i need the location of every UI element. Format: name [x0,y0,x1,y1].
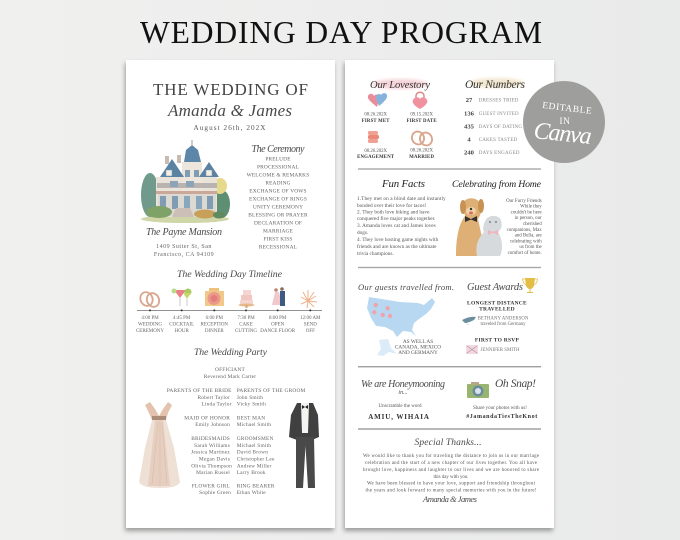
stat rows: DRESSES TRIED [479,98,519,104]
stat rows: CAKES TASTED [479,138,518,143]
illustration: wedding dress [139,402,180,488]
timeline labels: CAKE [239,322,253,328]
wedding party list: John Smith [237,395,263,401]
panel: left program card [126,60,335,528]
wedding party list: Andrew Miller [237,463,271,469]
heading: the wedding of: THE WEDDING OF [153,80,308,99]
milestone: engagement: 08.26.202X [364,149,388,154]
venue address [154,244,214,258]
stat rows: DAYS ENGAGED [479,151,520,156]
heading: special thanks: Special Thanks... [414,438,482,448]
ceremony order list: READING [265,181,291,187]
ceremony order list: MARRIAGE [263,229,294,235]
ceremony heading: The Ceremony [252,144,305,155]
badge: editable in canva: Canva [533,118,593,150]
timeline heading: The Wedding Day Timeline [177,269,283,280]
milestone: first met: FIRST MET [362,119,390,124]
icon: rings [410,130,434,147]
stat rows: 27 [466,97,473,104]
heading: our numbers: Our Numbers [465,79,526,91]
wedding party list: Christopher Lee [237,457,275,463]
scramble prompt: Unscramble the word [378,404,422,409]
icon: two hearts [368,93,387,107]
text: also from: CANADA, MEXICO [395,345,441,351]
text: fun facts [357,196,446,257]
badge: editable in canva: IN [559,117,571,127]
timeline labels: SEND [304,322,317,328]
signature: Amanda & James [422,494,478,504]
illustration: dog and cat [456,198,502,256]
title: WEDDING DAY PROGRAM [140,15,542,50]
timeline labels: 6:00 PM [206,316,224,321]
panel: right program card [345,60,554,528]
text: thank you message: celebration and the start of a new chapter of our lives together. You all have [365,461,537,466]
section: oh snap [466,378,537,420]
ceremony order list: WELCOME & REMARKS [247,173,309,179]
ceremony order list: RECESSIONAL [259,245,297,251]
timeline labels: CEREMONY [136,329,164,334]
wedding party list: Vicky Smith [237,402,266,408]
map: united states [367,297,435,356]
milestone: engagement: ENGAGEMENT [357,155,395,160]
text: thank you message: We have been blessed to have your love, support and friendship throughout [367,482,536,486]
illustration: mansion [141,140,230,223]
text: furry friends: us from the [519,245,542,250]
wedding party list: RING BEARER [237,483,275,489]
wedding party list: Ethan White [237,490,266,496]
stat rows: 136 [464,110,475,117]
ceremony order list: BLESSING OR PRAYER [248,213,308,219]
timeline labels: 8:00 PM [269,316,287,321]
text: fun facts: 4. They love hosting game nights with [357,237,439,243]
wedding party list: FLOWER GIRL [192,483,230,489]
text: furry friends: in person, our [515,216,542,221]
scrambled word: AMIU, WIHAIA [368,413,430,421]
award: longest distance: TRAVELLED [479,307,515,313]
icon: camera [467,382,489,398]
icon: wedding rings [138,290,161,309]
small heading suffix: in... [398,390,408,396]
text: furry friends: companions, Max [507,228,542,233]
text: fun facts: dogs. [357,230,368,236]
text: furry friends [506,199,542,256]
timeline labels: OPEN [271,322,285,328]
text: also from: AND GERMANY [398,350,438,356]
text: fun facts: trivia champions. [357,251,394,257]
heading: guest awards: Guest Awards [467,282,523,293]
stat rows: GUEST INVITED [479,112,519,117]
wedding party list [167,367,306,496]
text: furry friends: While they [520,205,542,210]
milestone: married: MARRIED [409,155,434,160]
timeline labels: HOUR [175,329,189,334]
ceremony order list: PRELUDE [265,157,291,163]
ceremony order list: EXCHANGE OF RINGS [249,197,307,203]
icon: airplane [462,317,476,325]
milestone: first met [362,112,390,124]
icon: dancing couple [272,287,285,306]
milestone: first date [407,112,437,124]
award: first to rsvp: JENNIFER SMITH [480,348,520,353]
ceremony order list [247,157,309,251]
ceremony order list: FIRST KISS [263,237,293,243]
icon: engagement [368,131,379,143]
icon: sparkler send off [301,290,317,308]
text: also from: AS WELL AS [403,339,433,345]
heading: oh snap: Oh Snap! [495,378,536,390]
text: fun facts: 3. Amanda loves cat and James loves [357,223,436,229]
text: furry friends: comfort of home. [508,251,542,256]
milestone: first met: 08.26.202X [364,112,388,118]
ceremony order list: DECLARATION OF [254,221,302,227]
text: thank you message: brought love, happiness and laughter to our lives and we are honored to share [363,468,539,473]
venue name: The Payne Mansion [146,227,222,238]
timeline labels: 4:00 PM [141,316,159,321]
stat rows: DAYS OF DATING [479,125,522,130]
wedding party list: OFFICIANT [215,367,245,373]
wedding party list: Linda Taylor [201,402,232,408]
wedding party list: Robert Taylor [197,395,230,401]
wedding party list: PARENTS OF THE GROOM [237,388,306,394]
wedding party list: MAID OF HONOR [184,415,230,421]
wedding party list: Emily Johnson [195,422,230,428]
stat rows: 240 [464,149,475,156]
icon: wedding cake [238,290,254,308]
text: thank you message: We would like to thank you for traveling the distance to join us in our marriage [363,454,539,459]
heading: celebrating from home: Celebrating from Home [452,179,542,190]
text: furry friends: couldn't be here [511,210,542,215]
illustration: tuxedo [289,403,319,488]
icon: reception dinner [205,288,224,306]
wedding party list: Michael Smith [237,422,271,428]
wedding party list: Olivia Thompson [191,463,232,469]
share prompt: Share your photos with us! [473,406,527,411]
text: fun facts: friends and are known as the ultimate [357,243,437,250]
map markers [372,303,392,318]
badge: editable in canva [523,81,605,163]
timeline labels: 4:45 PM [173,316,191,321]
text: furry friends: Our Furry Friends [506,199,542,204]
wedding party list: Sarah Williams [194,443,230,449]
icon: trophy [522,278,538,293]
wedding party list: Jessica Martinez [191,450,230,456]
text: thank you message [363,454,539,494]
icon: cocktails [172,288,192,306]
text: fun facts: 2. They both love hiking and have [357,210,430,216]
stat rows: 4 [467,136,471,143]
award: first to rsvp: FIRST TO RSVP [475,337,519,343]
date: August 26th, 202X [194,124,266,132]
milestone: first date: 09.15.202X [410,112,434,118]
ceremony order list: EXCHANGE OF VOWS [249,189,307,195]
badge: editable in canva: EDITABLE [542,101,593,117]
text: fun facts: bonded over their love for tacos! [357,202,427,209]
ceremony order list: UNITY CEREMONY [253,205,303,211]
couple names: Amanda & James [167,101,292,120]
timeline labels: DANCE FLOOR [260,329,296,334]
timeline labels [136,316,321,334]
heading: guests travelled: Our guests travelled from. [358,282,454,292]
wedding party list: David Brown [237,450,268,456]
text: thank you message: the years and look forward to many special memories with you in the future! [366,488,537,494]
wedding party list: PARENTS OF THE BRIDE [167,388,232,394]
wedding party list: Larry Brook [237,470,266,476]
timeline labels: 7:30 PM [237,316,255,321]
timeline labels: 12:00 AM [300,316,321,321]
heading: fun facts: Fun Facts [381,178,425,190]
timeline labels: CUTTING [235,329,257,334]
award: first to rsvp [466,337,520,354]
timeline labels: WEDDING [138,322,162,328]
heading: our lovestory: Our Lovestory [370,80,430,91]
wedding party list: GROOMSMEN [237,436,274,442]
chart: timeline [136,287,322,334]
section: our lovestory [357,79,437,160]
award: longest distance [462,300,529,327]
wedding party heading: The Wedding Party [194,347,268,358]
milestone: engagement [357,149,395,160]
section: honeymoon [361,379,445,421]
timeline labels: COCKTAIL [169,322,194,328]
award: longest distance: BETHANY ANDERSON [478,316,529,322]
wedding party list: Michael Smith [237,443,271,449]
text: fun facts: conquered five major peaks together. [357,215,435,222]
icon: envelope stamp [466,345,478,354]
text: also from [395,339,441,356]
text: thank you message: this day with you. [433,475,469,480]
ceremony order list: PROCESSIONAL [257,165,299,171]
wedding party list: Megan Davis [199,457,230,463]
hashtag: #JamandaTiesTheKnot [466,414,537,420]
milestone: married [409,148,434,160]
venue address: Francisco, CA 94109 [154,252,214,258]
stat rows: 435 [464,123,475,130]
timeline labels: RECEPTION [201,322,228,328]
text: fun facts: 1.They met on a blind date and instantly [357,196,446,202]
section: our numbers [464,78,526,156]
icon: padlock [413,92,427,109]
wedding party list: Marian Russel [196,470,230,476]
award: longest distance: traveled from Germany [480,322,526,327]
milestone: married: 08.26.202X [410,148,434,154]
heading: honeymooning: We are Honeymooning [361,379,445,390]
text: furry friends: celebrating with [510,239,542,244]
milestone: first date: FIRST DATE [407,119,437,124]
venue address: 1409 Sutter St, San [156,244,212,250]
wedding party list: BRIDESMAIDS [191,436,230,442]
text: furry friends: cherished [523,222,542,227]
wedding party list: BEST MAN [237,415,265,421]
award: longest distance: LONGEST DISTANCE [467,300,527,306]
wedding party list: Reverend Mark Carter [204,374,256,380]
timeline labels: DINNER [205,329,224,334]
timeline labels: OFF [306,329,315,334]
stat rows [464,97,522,156]
text: furry friends: and Bella, are [515,234,542,239]
wedding party list: Sophie Green [199,490,231,496]
